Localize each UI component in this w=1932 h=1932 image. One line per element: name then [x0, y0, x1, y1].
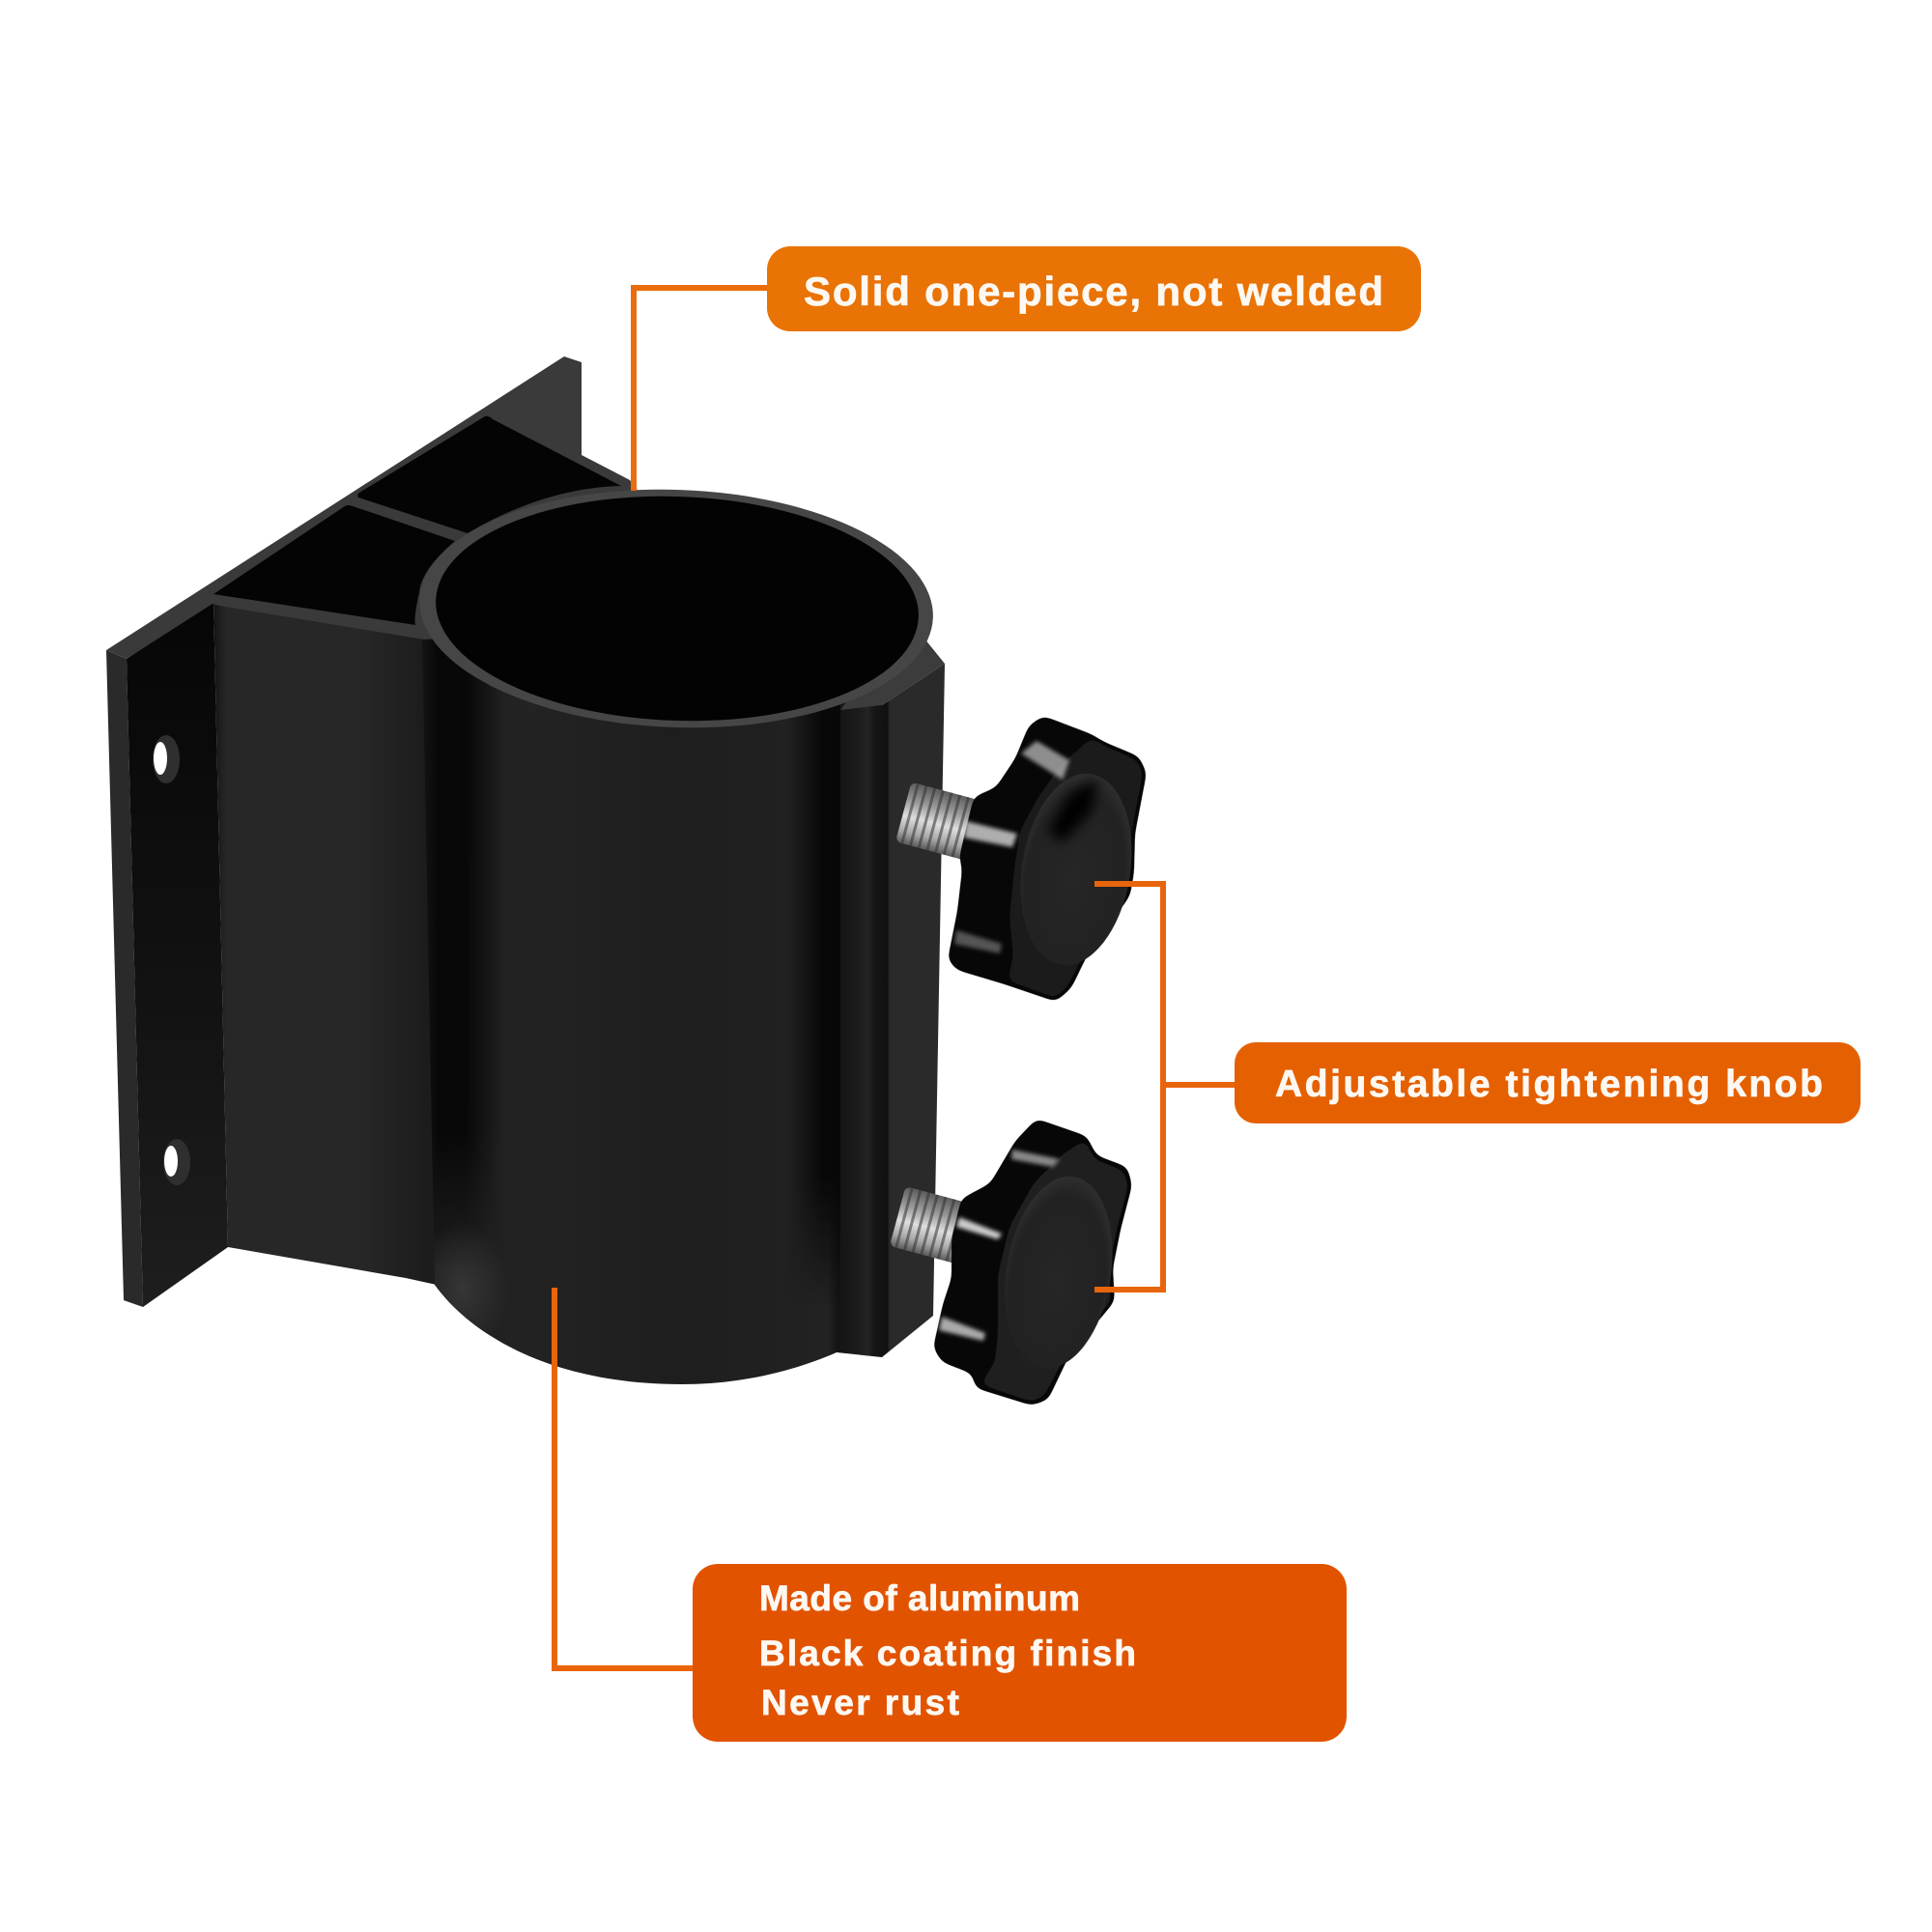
lower mounting hole	[163, 1139, 190, 1185]
knob highlights	[1021, 741, 1069, 780]
knob highlights	[1011, 1150, 1060, 1167]
knob front face	[980, 1140, 1128, 1402]
callout: adjustable knob	[1235, 1042, 1861, 1123]
tube opening	[432, 488, 923, 729]
text line: coating: Black coating finish	[759, 1634, 1136, 1673]
tube rim	[415, 481, 937, 736]
icon: lower tightening knob	[890, 1119, 1132, 1406]
callout: adjustable knob: Adjustable tightening knob	[1275, 1064, 1823, 1105]
threaded bolt	[890, 1186, 979, 1265]
plate inner face	[127, 601, 228, 1307]
callout: solid one-piece: Solid one-piece, not welded	[804, 269, 1383, 314]
icon: aluminum mount bracket	[106, 356, 945, 1384]
upper pocket	[357, 416, 621, 533]
dome reflection	[1048, 779, 1097, 842]
text line: rust: Never rust	[761, 1683, 959, 1722]
top face of fin	[106, 356, 676, 659]
leader line: material callout	[554, 1288, 694, 1668]
flange top face	[840, 618, 945, 710]
callout: material and finish	[693, 1564, 1347, 1742]
infographic canvas	[106, 246, 1861, 1742]
cylinder body with flange	[422, 633, 945, 1384]
leader line: one-piece callout	[634, 288, 767, 491]
icon: upper tightening knob	[895, 716, 1147, 1002]
knob star body	[948, 716, 1147, 1002]
text line: material: Made of aluminum	[759, 1578, 1080, 1618]
knob dome	[1008, 765, 1145, 974]
knob dome	[992, 1169, 1125, 1376]
left fold shadow	[423, 639, 491, 1217]
rib wall face	[213, 601, 437, 1285]
callout: solid one-piece	[767, 246, 1421, 331]
upper mounting hole	[153, 735, 180, 783]
leader bracket: knob callout	[1094, 884, 1236, 1290]
knob star body	[933, 1119, 1132, 1406]
knob front face	[1008, 738, 1143, 998]
plate edge face	[106, 650, 143, 1307]
lit lower corner	[435, 1242, 493, 1329]
body shading	[413, 618, 840, 1372]
lower pocket	[213, 505, 455, 625]
threaded bolt	[895, 782, 990, 863]
right side shadow	[798, 705, 840, 1267]
